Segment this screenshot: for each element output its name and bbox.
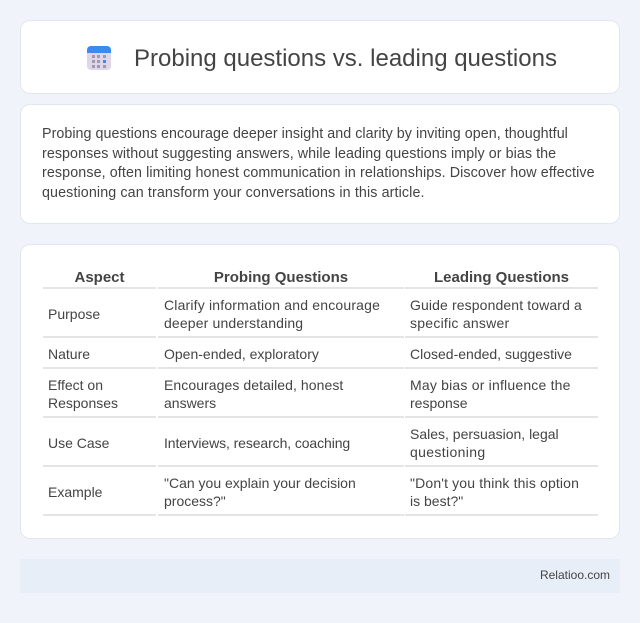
footer bbox=[20, 559, 620, 593]
row: purpose bbox=[48, 297, 582, 331]
table header: probing questions: Probing Questions bbox=[214, 269, 348, 286]
row: use case: Interviews, research, coaching bbox=[164, 435, 350, 451]
row: effect on responses: response bbox=[410, 395, 468, 411]
row: effect on responses bbox=[48, 377, 571, 411]
row: effect on responses: Effect on bbox=[48, 377, 103, 393]
row: nature bbox=[48, 346, 572, 362]
title: Probing questions vs. leading questions bbox=[134, 45, 557, 72]
row: use case bbox=[48, 426, 559, 460]
row: effect on responses: May bias or influence the bbox=[410, 377, 571, 393]
row: example: "Don't you think this option bbox=[410, 475, 579, 491]
row: example: process?" bbox=[164, 493, 226, 509]
row: use case: Sales, persuasion, legal bbox=[410, 426, 559, 442]
row: purpose: deeper understanding bbox=[164, 315, 303, 331]
intro text: response, often limiting honest communication in relationships. Discover how effective bbox=[42, 165, 595, 181]
row: purpose: Guide respondent toward a bbox=[410, 297, 582, 313]
row: effect on responses: Encourages detailed, honest bbox=[164, 377, 343, 393]
row: effect on responses: answers bbox=[164, 395, 216, 411]
row: purpose: Purpose bbox=[48, 306, 100, 322]
row: purpose: specific answer bbox=[410, 315, 509, 331]
intro text: Probing questions encourage deeper insight and clarity by inviting open, thoughtful bbox=[42, 126, 568, 142]
footer brand: Relatioo.com bbox=[540, 568, 610, 582]
row: effect on responses: Responses bbox=[48, 395, 118, 411]
row: use case: Use Case bbox=[48, 435, 109, 451]
table header: leading questions: Leading Questions bbox=[434, 269, 569, 286]
intro text: questioning can transform your conversations in this article. bbox=[42, 185, 425, 201]
panel: title card bbox=[20, 20, 620, 94]
table header: aspect: Aspect bbox=[74, 269, 125, 286]
row: nature: Closed-ended, suggestive bbox=[410, 346, 572, 362]
panel: introduction bbox=[20, 104, 620, 224]
row: nature: Nature bbox=[48, 346, 90, 362]
row: example: "Can you explain your decision bbox=[164, 475, 356, 491]
row: example bbox=[48, 475, 579, 509]
intro text: responses without suggesting answers, while leading questions imply or bias the bbox=[42, 146, 556, 162]
row: example: is best?" bbox=[410, 493, 463, 509]
icon: calendar bbox=[87, 46, 111, 70]
panel: comparison table bbox=[20, 244, 620, 539]
row: nature: Open-ended, exploratory bbox=[164, 346, 319, 362]
row: example: Example bbox=[48, 484, 102, 500]
row: purpose: Clarify information and encourage bbox=[164, 297, 380, 313]
intro text bbox=[42, 126, 595, 201]
row: use case: questioning bbox=[410, 444, 485, 460]
